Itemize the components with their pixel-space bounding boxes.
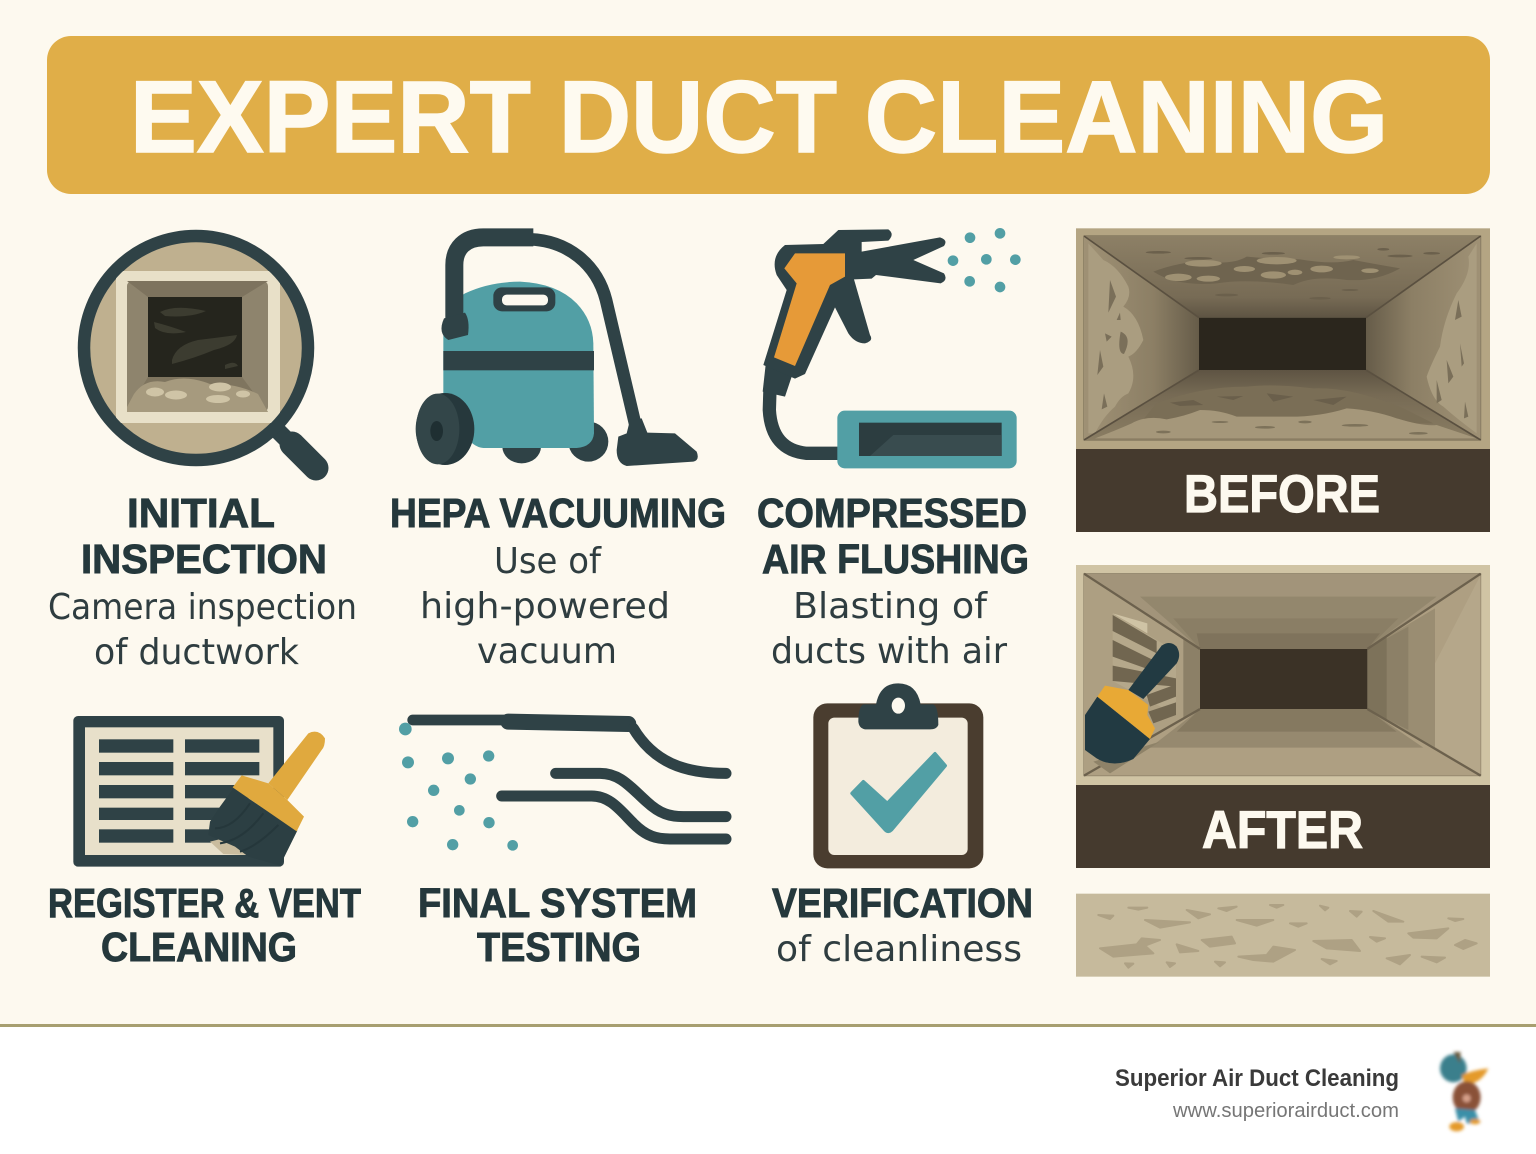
heading <box>81 490 327 582</box>
icon: airflow lines and dust particles <box>399 720 726 851</box>
bottom face dust <box>1140 385 1433 423</box>
heading: CLEANING <box>101 924 297 970</box>
description: Camera inspection <box>48 587 357 628</box>
heading: AIR FLUSHING <box>762 536 1029 582</box>
icon: air gun and duct box <box>763 228 1021 468</box>
heading <box>418 880 697 970</box>
description: Use of <box>494 541 602 582</box>
heading: FINAL SYSTEM <box>418 880 697 926</box>
description: vacuum <box>477 631 617 672</box>
icon: vent grille and brush <box>73 716 325 867</box>
step: final system testing <box>399 720 726 970</box>
panel: dust texture strip <box>1076 894 1490 977</box>
icon: vacuum cleaner <box>416 237 698 466</box>
right wall dust <box>1427 243 1477 433</box>
description: of cleanliness <box>776 929 1022 970</box>
heading: HEPA VACUUMING <box>390 490 726 536</box>
after label bar: AFTER <box>1202 801 1363 860</box>
company name: Superior Air Duct Cleaning <box>1115 1065 1399 1092</box>
dirty duct illustration <box>1076 228 1490 449</box>
heading: TESTING <box>477 924 641 970</box>
description: ducts with air <box>771 631 1007 672</box>
step: register and vent cleaning <box>48 716 361 970</box>
description <box>420 541 670 672</box>
step: initial inspection <box>48 236 357 673</box>
before label bar <box>1076 449 1490 532</box>
description: of ductwork <box>94 632 299 673</box>
mascot logo <box>1440 1052 1488 1131</box>
before label bar: BEFORE <box>1184 465 1380 524</box>
title banner <box>47 36 1490 194</box>
grille on wall <box>1113 613 1176 715</box>
footer band <box>0 1024 1536 1154</box>
clean duct illustration with brush <box>1076 565 1490 785</box>
description: Blasting of <box>793 586 988 627</box>
description <box>48 587 357 673</box>
icon: magnifying glass over duct opening <box>84 236 316 468</box>
panel: before <box>1076 228 1490 532</box>
step: verification <box>772 683 1033 970</box>
title banner: EXPERT DUCT CLEANING <box>130 60 1388 174</box>
description <box>771 586 1007 672</box>
website: www.superiorairduct.com <box>1172 1100 1399 1122</box>
heading: COMPRESSED <box>757 490 1027 536</box>
description: high-powered <box>420 586 670 627</box>
top face dust <box>1153 257 1400 285</box>
heading: INSPECTION <box>81 536 327 582</box>
icon: clipboard with check mark <box>813 683 983 868</box>
heading: INITIAL <box>127 490 275 536</box>
heading: VERIFICATION <box>772 880 1033 926</box>
heading <box>48 880 361 970</box>
step: HEPA vacuuming <box>390 237 726 672</box>
after label bar <box>1076 785 1490 868</box>
step: compressed air flushing <box>757 228 1029 672</box>
heading: REGISTER & VENT <box>48 880 361 926</box>
left wall dust <box>1088 243 1143 433</box>
heading <box>757 490 1029 582</box>
panel: after <box>1076 565 1490 868</box>
